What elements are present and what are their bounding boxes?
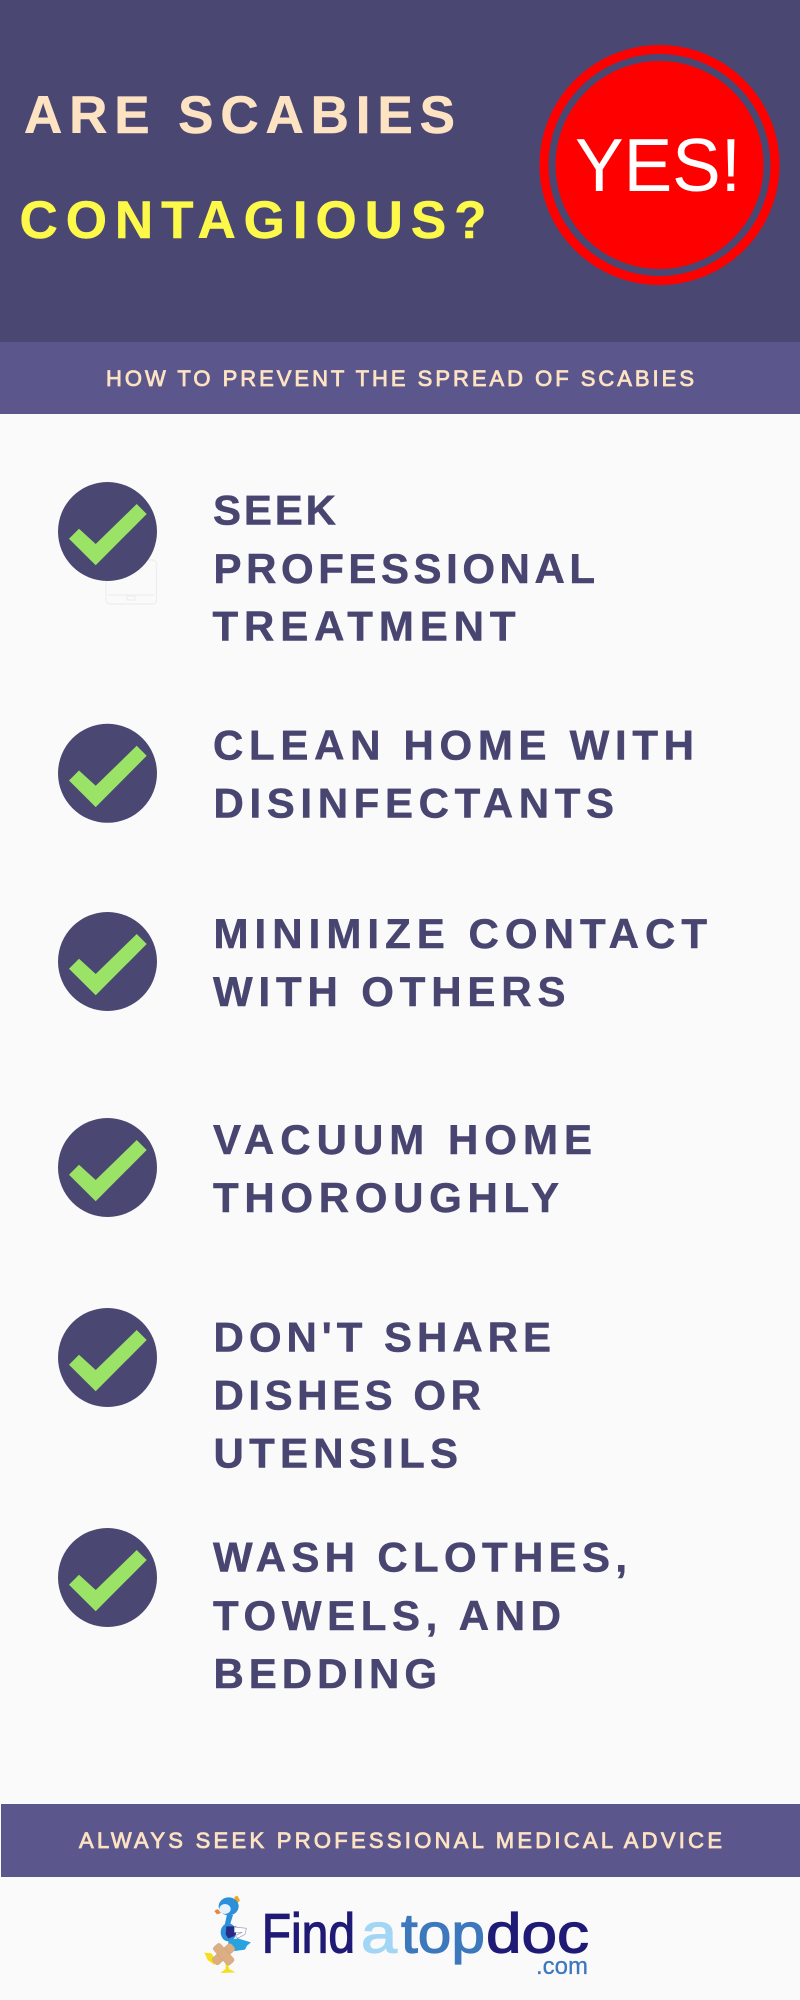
- item 4: vacuum home: [58, 1116, 592, 1221]
- text: don't share dishes or utensils: UTENSILS: [214, 1429, 458, 1476]
- text: clean home with disinfectants: DISINFECTANTS: [214, 779, 614, 826]
- item 3: minimize contact: [58, 910, 707, 1015]
- icon: check mark: [58, 1118, 157, 1217]
- text: minimize contact with others: [213, 910, 707, 1015]
- icon: duck mascot: [204, 1896, 251, 1973]
- text: minimize contact with others: MINIMIZE CONTACT: [214, 910, 707, 957]
- text: seek professional treatment: SEEK: [213, 486, 336, 534]
- logo wordmark: a: [361, 1902, 398, 1965]
- yes badge: [540, 45, 780, 285]
- icon: check mark: [58, 724, 157, 823]
- text: vacuum home thoroughly: [213, 1116, 592, 1221]
- header panel: [0, 0, 800, 342]
- text: wash clothes, towels, and bedding: BEDDING: [214, 1650, 437, 1697]
- title line 2: CONTAGIOUS?: [20, 191, 486, 250]
- text: clean home with disinfectants: CLEAN HOME WITH: [213, 722, 694, 768]
- subtitle band: HOW TO PREVENT THE SPREAD OF SCABIES: [106, 366, 694, 391]
- logo wordmark: Find: [262, 1902, 355, 1965]
- footer band: ALWAYS SEEK PROFESSIONAL MEDICAL ADVICE: [79, 1828, 722, 1853]
- item 1: seek professional treatment: [58, 482, 595, 649]
- text: seek professional treatment: PROFESSIONAL: [214, 545, 595, 592]
- logo wordmark: .com: [536, 1953, 588, 1980]
- icon: check mark: [58, 482, 157, 581]
- text: wash clothes, towels, and bedding: WASH CLOTHES,: [213, 1533, 627, 1580]
- text: seek professional treatment: [212, 486, 595, 649]
- icon: check mark: [58, 1308, 157, 1407]
- text: vacuum home thoroughly: VACUUM HOME: [213, 1116, 592, 1163]
- icon: faint phone outline: [106, 560, 156, 604]
- icon: check mark: [58, 912, 157, 1011]
- text: wash clothes, towels, and bedding: TOWELS, AND: [213, 1592, 561, 1639]
- text: minimize contact with others: WITH OTHERS: [213, 968, 566, 1015]
- text: seek professional treatment: TREATMENT: [212, 602, 516, 649]
- text: don't share dishes or utensils: DON'T SHARE: [214, 1313, 551, 1360]
- icon: check mark: [58, 1528, 157, 1627]
- item 5: don't share dishes: [58, 1308, 551, 1476]
- text: wash clothes, towels, and bedding: [213, 1533, 627, 1697]
- subtitle band: [0, 342, 800, 414]
- text: don't share dishes or utensils: DISHES OR: [214, 1371, 481, 1418]
- item 2: clean home: [58, 722, 694, 826]
- text: don't share dishes or utensils: [214, 1313, 551, 1476]
- logo wordmark: top: [401, 1902, 485, 1965]
- yes badge: YES!: [575, 123, 741, 207]
- logo wordmark: doc: [486, 1902, 589, 1965]
- text: vacuum home thoroughly: THOROUGHLY: [213, 1174, 559, 1221]
- footer band: [1, 1804, 800, 1877]
- item 6: wash clothes: [58, 1528, 627, 1697]
- text: clean home with disinfectants: [213, 722, 694, 826]
- logo: [204, 1896, 589, 1980]
- logo wordmark: [262, 1902, 589, 1980]
- title line 1: ARE SCABIES: [24, 86, 455, 145]
